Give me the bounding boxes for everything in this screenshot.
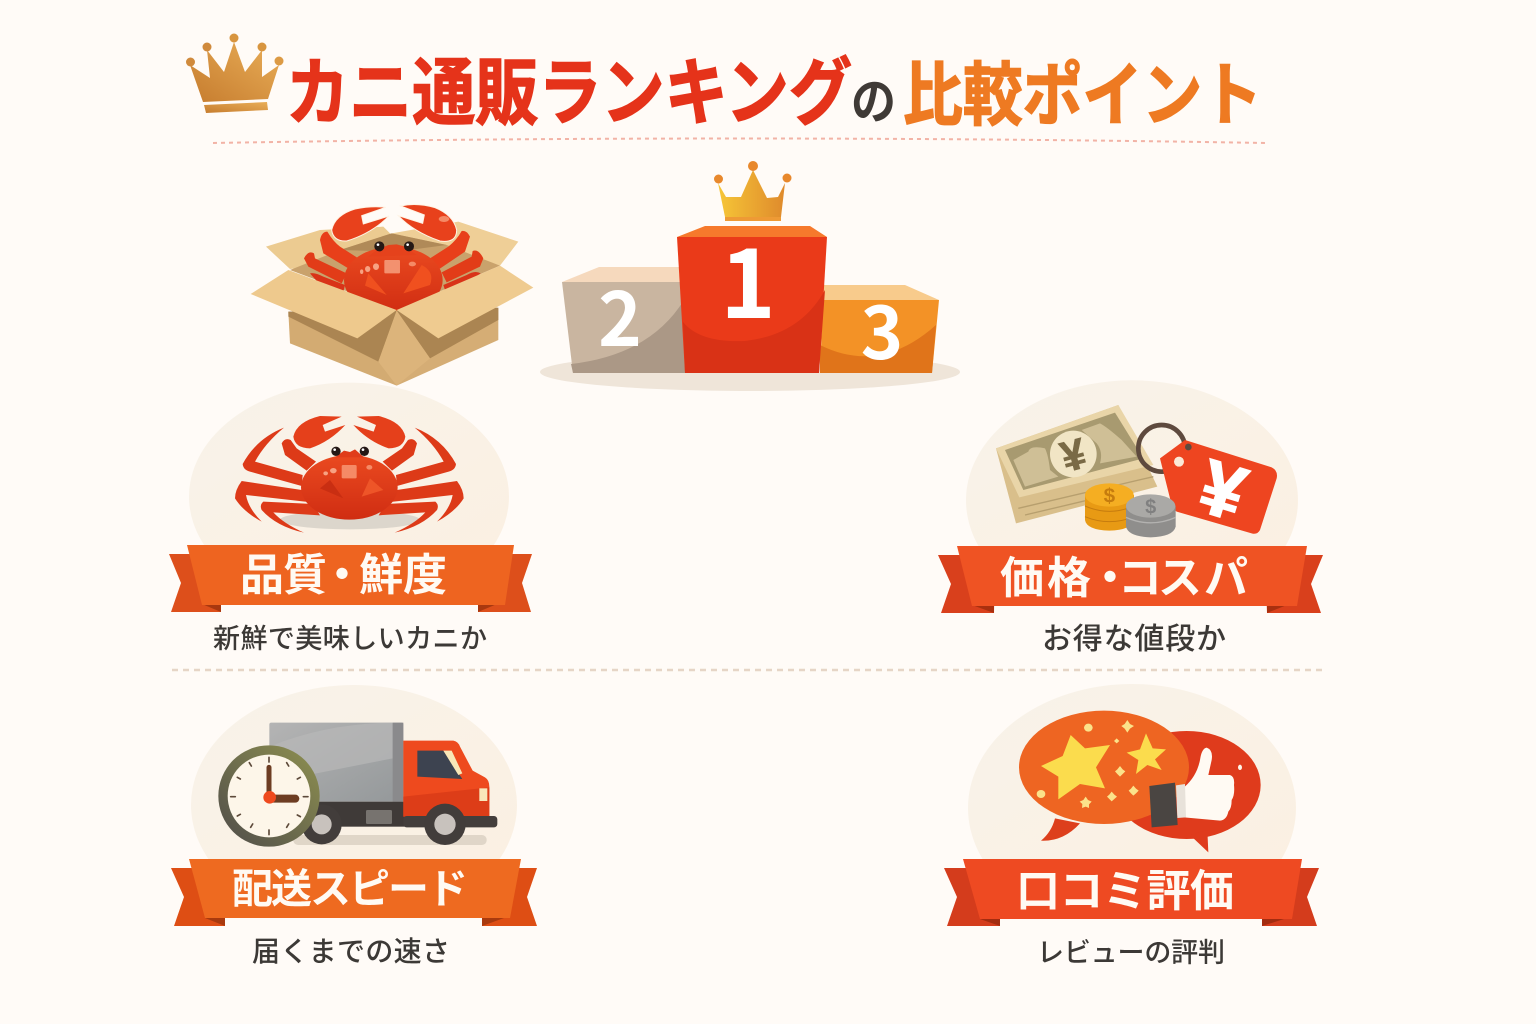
panel: reviews <box>944 684 1319 968</box>
ribbon: reviews <box>944 859 1319 926</box>
panel: quality <box>169 383 532 654</box>
panel backdrop <box>968 684 1296 870</box>
panel backdrop <box>966 380 1298 560</box>
caption: quality: 新鮮で美味しいカニか <box>213 624 487 654</box>
crab in box <box>304 205 483 313</box>
ribbon label: 口コミ評価 <box>1016 867 1234 916</box>
title <box>186 34 1262 134</box>
ribbon label: 配送スピード <box>232 866 468 912</box>
podium chart <box>540 161 960 391</box>
panel: delivery <box>171 685 537 967</box>
panel backdrop <box>191 685 517 870</box>
heading: orange part: 比較ポイント <box>903 57 1262 134</box>
podium 2: 2 <box>598 261 642 368</box>
caption: reviews: レビューの評判 <box>1037 938 1225 968</box>
icon: title crown <box>186 34 284 113</box>
ribbon: delivery <box>171 859 537 926</box>
icon: podium crown <box>714 161 792 221</box>
icon: money, coins and price tag: ¥ <box>1190 444 1255 538</box>
icon: money, coins and price tag: $ <box>1145 496 1156 518</box>
podium 1: 1 <box>720 210 776 346</box>
podium shadow <box>540 353 960 391</box>
icon: money, coins and price tag <box>996 405 1277 538</box>
ribbon label: 価格・コスパ <box>1000 554 1248 603</box>
ribbon: price <box>938 546 1323 613</box>
podium 1 <box>677 210 827 373</box>
caption: delivery: 届くまでの速さ <box>252 936 450 967</box>
heading: red part: カニ通販ランキング <box>286 53 852 134</box>
icon: crab in cardboard box <box>251 205 533 386</box>
icon: money, coins and price tag: ¥ <box>1056 430 1091 482</box>
icon: truck and clock <box>218 723 497 847</box>
podium 3: 3 <box>861 275 903 380</box>
podium 2 <box>562 261 686 373</box>
caption: price: お得な値段か <box>1042 623 1226 656</box>
panel: price <box>938 380 1323 656</box>
ribbon label: 品質・鮮度 <box>240 551 447 600</box>
icon: speech bubbles with stars and thumbs up <box>1019 711 1261 852</box>
panel backdrop <box>189 383 509 560</box>
podium 3 <box>820 275 939 380</box>
icon: crab <box>235 416 464 533</box>
icon: money, coins and price tag: $ <box>1104 485 1116 508</box>
heading: connective: の <box>851 74 896 130</box>
ribbon: quality <box>169 545 532 612</box>
